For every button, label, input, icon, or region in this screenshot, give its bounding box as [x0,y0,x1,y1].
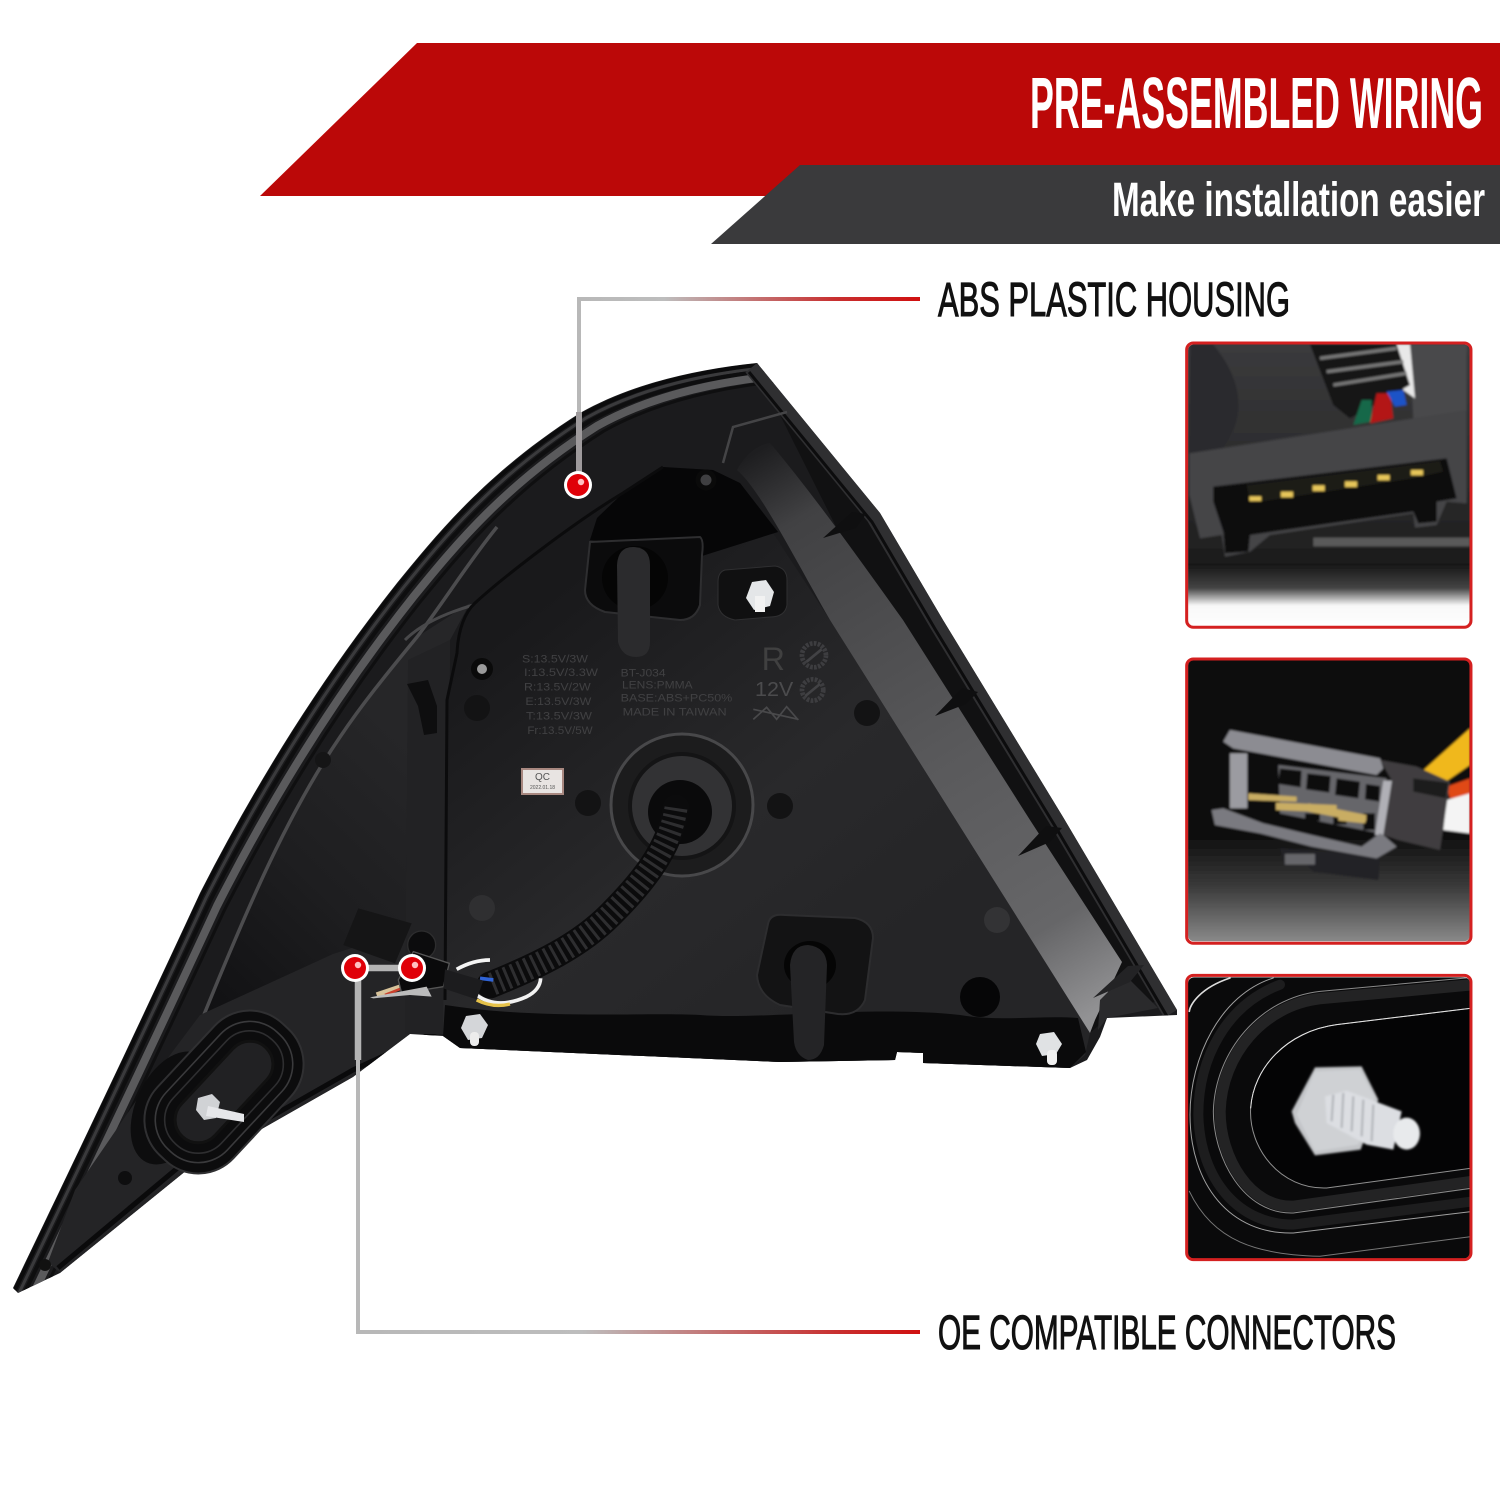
side clip [407,680,437,735]
rim fins [823,512,1144,998]
QC sticker: QC [535,772,550,783]
embossed specs: I:13.5V/3.3W [524,667,599,679]
label: housing: ABS PLASTIC HOUSING [938,274,1290,327]
wing side strip [426,1028,441,1034]
hex bolt lower right [1036,1032,1062,1065]
wiring conduit [490,808,676,985]
QC sticker: 2022.01.18 [530,785,555,791]
embossed specs: E:13.5V/3W [525,696,592,708]
marker: connector right [398,954,426,982]
plate lower shadow [443,1005,1086,1068]
leader: connectors [358,968,920,1332]
wing upper panel [197,603,470,1032]
leader: connector overlay on lamp [358,968,412,1060]
embossed specs: Fr:13.5V/5W [527,725,593,737]
marker: connector left [341,954,369,982]
tail light product [0,340,1200,1310]
inset: connector pins [1187,342,1473,628]
embossed specs: 12V [755,678,794,701]
QC sticker [522,769,563,794]
embossed specs: MADE IN TAIWAN [623,706,727,718]
corner fold [723,412,787,463]
inset: bolt and bellows [1187,975,1473,1261]
recess below top band [590,467,778,556]
marker: housing [564,471,592,499]
wiring connectors [343,908,483,999]
embossed specs: S:13.5V/3W [522,654,589,666]
upper mount boss [585,537,703,657]
ridge line [404,604,472,641]
hex bolt top [746,580,774,612]
embossed specs: R:13.5V/2W [524,682,591,694]
leader: housing overlay on lamp [576,412,582,482]
rubber grommet [611,734,753,876]
embossed specs: BASE:ABS+PC50% [621,693,733,705]
rim corner tab [1098,975,1158,1030]
plate holes [464,695,1010,1017]
leader: housing [579,299,920,480]
bolt mount recess [718,566,787,620]
back plate [443,467,1090,1068]
embossed specs [522,641,826,737]
right rim band [737,443,1122,1033]
outer rim strip [749,363,1177,1018]
hex bolt lower left [461,1014,488,1046]
plate outline highlight [445,467,663,1000]
banner: red header [260,43,1500,196]
bundle wires [377,960,541,1005]
rubber bellows oval [114,991,323,1193]
wing lower edge [58,1030,440,1268]
embossed specs: BT-J034 [621,668,666,680]
wing lower panel [48,940,410,1273]
banner: dark subheader [711,165,1500,244]
embossed specs: LENS:PMMA [622,679,693,691]
embossed specs: T:13.5V/3W [526,710,593,722]
lamp silhouette and rim strips [0,340,1200,1310]
inset: connector housing [1187,657,1473,943]
wing panel edge [197,527,497,1032]
lower mount boss [757,915,873,1060]
rim channel [770,395,1160,1033]
embossed specs: R [762,641,785,677]
screw [39,472,714,1271]
